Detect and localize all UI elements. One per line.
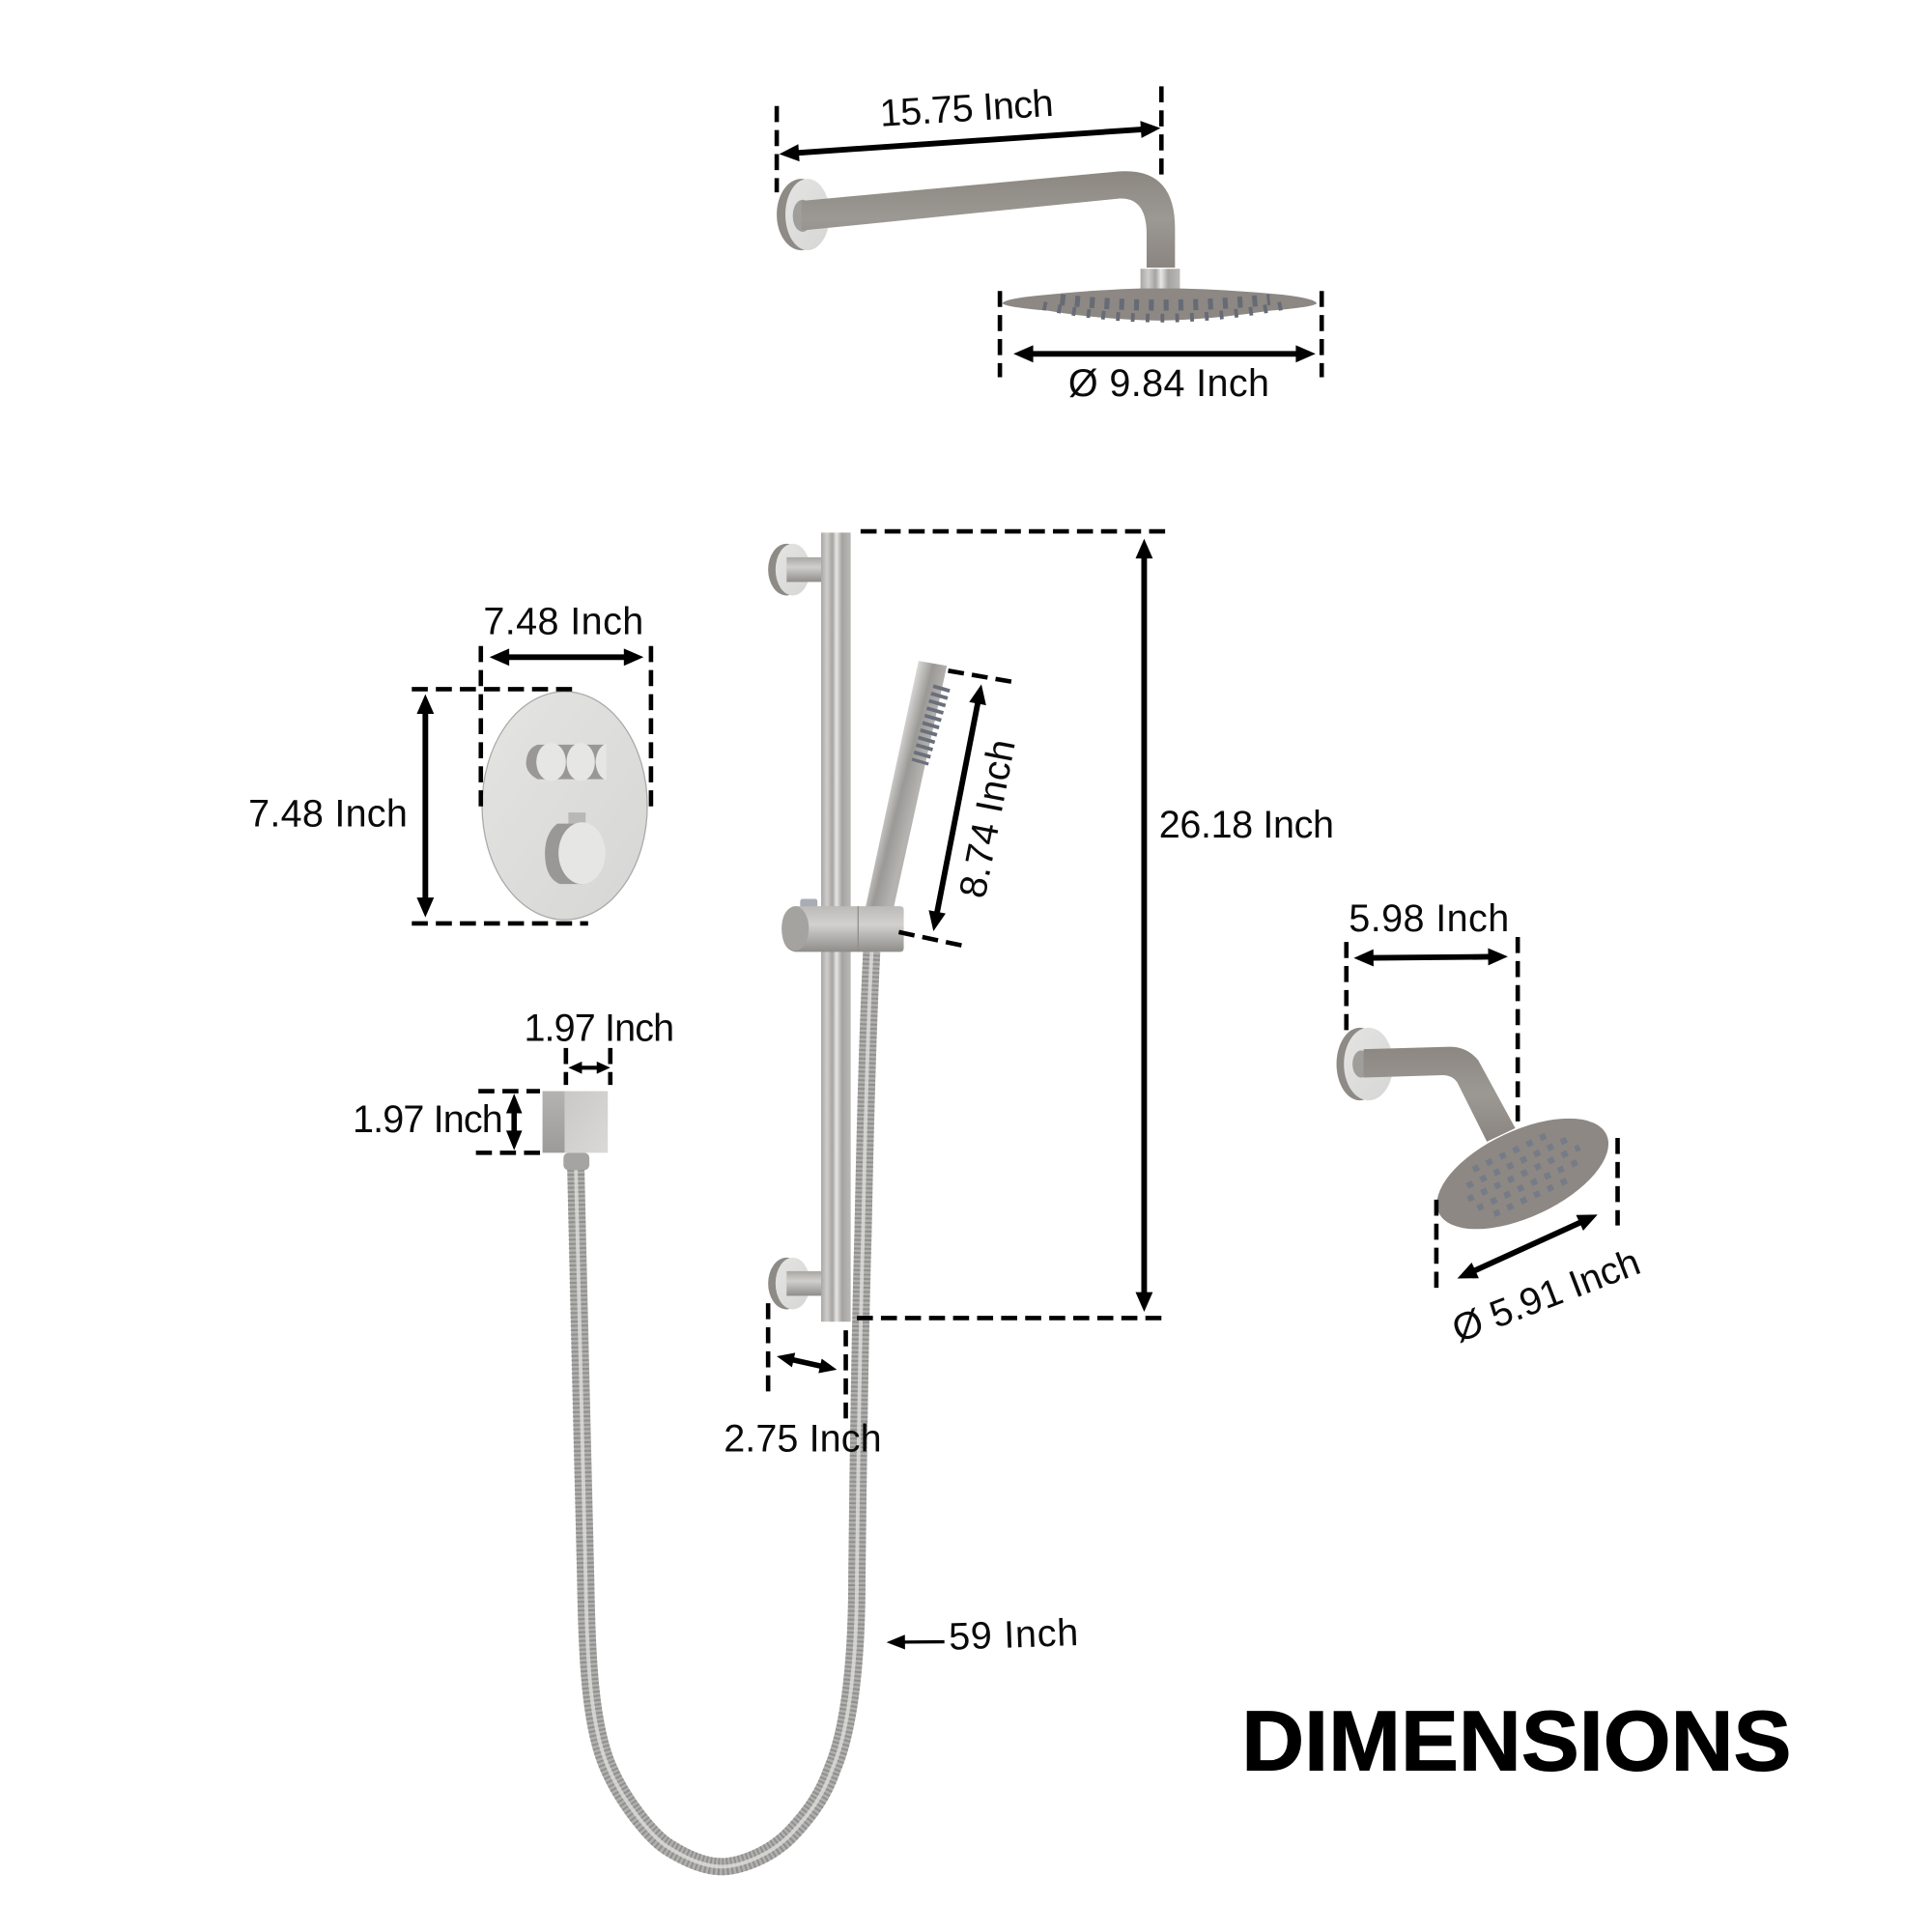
shower head [1421,1095,1625,1252]
temperature dial [545,812,606,884]
shower arm [1364,1047,1516,1142]
top wall bracket [768,544,822,595]
label: outlet width: 1.97 Inch [524,1007,674,1049]
label: valve height: 7.48 Inch [248,792,408,835]
dimension guide lines: head diameter [1436,1138,1618,1289]
dimension guide lines: bracket depth [768,1303,846,1419]
arrow: head diameter [1454,1207,1601,1287]
panel: thermostatic valve [248,600,651,923]
arrow: hose length [887,1634,945,1650]
shower neck [1141,269,1179,290]
panel: small shower arm and head [1337,897,1646,1351]
arrow: outlet height [506,1094,523,1151]
shower head nozzles [1043,299,1282,318]
arrow: 15.75 inch [779,120,1161,162]
title: DIMENSIONS [1241,1693,1791,1789]
selector knobs [526,743,607,781]
wall outlet cube [543,1092,608,1170]
hand shower [866,661,947,912]
shower head nozzles [1458,1124,1590,1222]
label: 9.84 inch: Ø 9.84 Inch [1068,362,1269,405]
label: hose length: 59 Inch [948,1611,1079,1659]
arrow: valve width [490,648,643,666]
slide bar [821,532,851,1321]
metal hose [576,952,871,1866]
panel: rain shower arm and head [777,82,1321,405]
valve plate [482,692,647,920]
dimension guide lines: head diameter [1000,291,1321,378]
arrow: outlet width [568,1062,611,1074]
dimension guide lines: arm reach [1347,937,1518,1123]
arrow: valve height [416,695,434,918]
rain shower head [1003,289,1317,321]
arrow: bracket depth [775,1349,838,1377]
arrow: 9.84 inch [1013,345,1316,362]
wall flange [777,179,830,250]
sliding holder [781,898,904,952]
bottom wall bracket [768,1258,822,1309]
label: outlet height: 1.97 Inch [353,1098,503,1141]
shower arm [802,171,1175,268]
label: valve width: 7.48 Inch [483,600,643,642]
dimension guide lines: outlet [476,1048,611,1152]
wall flange [1337,1028,1393,1100]
dimension guide lines: arm length [777,86,1161,192]
panel: hose with wall outlet [353,952,1079,1866]
dimension guide lines: valve [412,646,651,923]
arrow: bar height [1135,539,1152,1312]
label: 15.75 inch: 15.75 Inch [878,82,1055,135]
arrow: arm reach [1353,948,1508,967]
label: arm reach: 5.98 Inch [1349,897,1509,940]
label: hand shower length: 8.74 Inch [952,736,1024,901]
panel: slide bar with hand shower [724,531,1334,1460]
label: bar height: 26.18 Inch [1159,804,1334,846]
label: head diameter: Ø 5.91 Inch [1446,1240,1646,1351]
label: bracket depth: 2.75 Inch [724,1417,882,1460]
dimension guide lines: bar height [857,531,1168,1318]
dimension guide lines: hand shower [898,670,1012,946]
arrow: hand shower length [925,683,990,933]
hand shower nozzles [920,687,942,763]
